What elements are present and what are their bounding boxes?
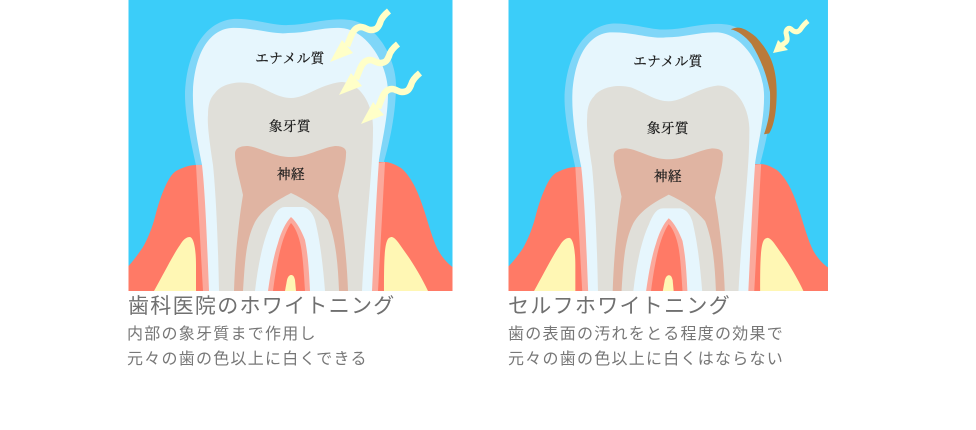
inner bone [285, 275, 296, 291]
arrow 2 [339, 44, 398, 95]
pulp [613, 148, 725, 291]
inner enamel arch [255, 207, 325, 291]
label: enamel: エナメル質 [255, 51, 325, 66]
heading: self whitening: セルフホワイトニング [508, 295, 731, 318]
text: dental clinic line 2: 元々の歯の色以上に白くできる [127, 350, 368, 368]
inner dentin arch [243, 193, 339, 291]
enamel halo [565, 23, 772, 177]
inner membrane arch [268, 217, 310, 291]
inner enamel arch [633, 208, 702, 291]
enamel [193, 28, 388, 291]
inner dentin arch [622, 195, 716, 291]
text: dental clinic line 1: 内部の象牙質まで作用し [127, 325, 317, 343]
gums [508, 164, 828, 291]
enamel [572, 32, 764, 291]
label: dentin (right): 象牙質 [647, 121, 689, 136]
right bone [760, 238, 803, 291]
label: nerve (right): 神経 [654, 168, 682, 184]
heading: dental clinic whitening: 歯科医院のホワイトニング [128, 295, 396, 318]
left bone [154, 237, 196, 291]
brown stain on enamel [731, 28, 777, 134]
arrow 3 [361, 73, 420, 124]
arrow 1 [330, 11, 389, 62]
label: nerve: 神経 [277, 166, 305, 182]
inner gum arch [273, 223, 305, 291]
label: enamel (right): エナメル質 [633, 54, 703, 69]
enamel halo [185, 19, 396, 175]
label: dentin: 象牙質 [269, 119, 311, 134]
dentin [208, 82, 373, 291]
panel: dental clinic whitening diagram [128, 0, 452, 291]
dentin [587, 86, 749, 291]
text: self whitening line 2: 元々の歯の色以上に白くはならない [508, 350, 784, 368]
small arrow [773, 21, 808, 53]
gums [128, 162, 452, 291]
right bone [384, 237, 428, 291]
panel: self whitening diagram [508, 0, 828, 291]
pulp [234, 146, 348, 291]
left bone [534, 238, 575, 291]
inner gum arch [651, 224, 682, 291]
periodontal membrane [575, 164, 761, 291]
periodontal membrane [196, 162, 385, 291]
text: self whitening line 1: 歯の表面の汚れをとる程度の効果で [508, 325, 784, 343]
inner bone [663, 275, 674, 291]
inner membrane arch [646, 218, 687, 291]
